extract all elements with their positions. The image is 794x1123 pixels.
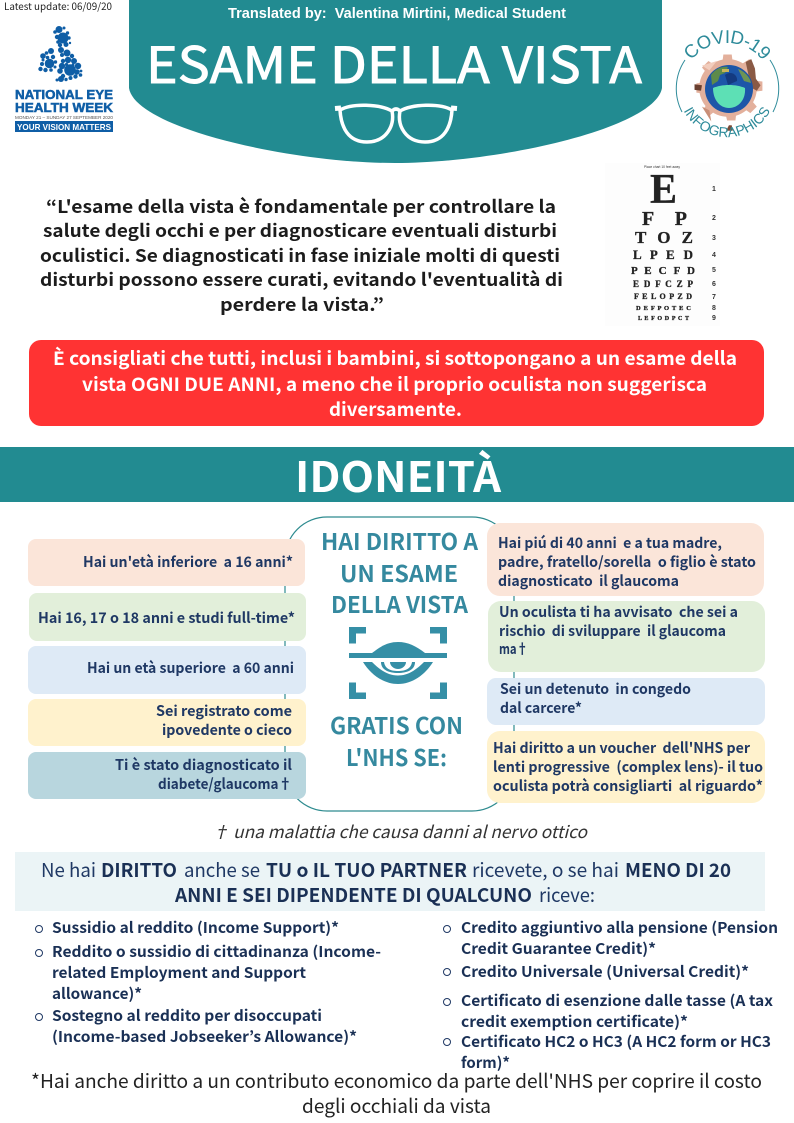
- logo: National Eye Health Week: [15, 26, 113, 132]
- eye chart: 6: [712, 281, 716, 288]
- criterion: visually impaired: [28, 699, 306, 746]
- benefits heading band: Ne hai: [41, 856, 96, 883]
- criterion: diabetes or glaucoma: diabete/glaucoma†: [158, 773, 292, 794]
- item: pension credit: [444, 917, 778, 959]
- criterion: visually impaired: Sei registrato come: [156, 700, 292, 721]
- red callout: vista OGNI DUE ANNI, a meno che il proprio oculista non suggerisca: [82, 371, 707, 397]
- item: HC2 or HC3 certificate: form)*: [461, 1052, 510, 1073]
- criterion: full-time student: [29, 593, 306, 641]
- eye chart: L P E D: [633, 247, 693, 262]
- item: income support: Sussidio al reddito (Income Support)*: [52, 917, 339, 938]
- criterion: glaucoma risk: Un oculista ti ha avvisato che sei a: [499, 601, 738, 622]
- benefits heading band: [15, 852, 765, 911]
- criterion: prisoner on leave: [487, 678, 765, 725]
- eye chart: L E F O D P C T: [638, 316, 689, 322]
- eye chart: F E L O P Z D: [634, 292, 692, 301]
- eye chart: D E F P O T E C: [636, 305, 691, 312]
- logo: COVID-19 infographics: [676, 30, 780, 138]
- quote: disturbi possono essere curati, evitando l'eventualità di: [40, 267, 563, 292]
- icon: glasses: [335, 105, 457, 142]
- eye chart: E: [650, 167, 677, 213]
- INFOGRAPHICS arc text: INFOGRAPHICS: [684, 107, 770, 138]
- criterion: over 60: Hai un età superiore a 60 anni: [87, 657, 294, 678]
- item: HC2 or HC3 certificate: Certificato HC2 o HC3 (A HC2 form or HC3: [461, 1031, 771, 1052]
- central panel: [285, 517, 514, 811]
- criterion: under 16: [28, 539, 305, 586]
- item: tax credit exemption: Certificato di esenzione dalle tasse (A tax: [461, 990, 774, 1011]
- panel heading bottom: L'NHS SE:: [346, 739, 447, 773]
- quote: oculistici. Se diagnosticati in fase iniziale molti di questi: [40, 243, 560, 268]
- icon: UK map made of dots: [38, 26, 82, 82]
- panel heading top: DELLA VISTA: [331, 586, 468, 620]
- criterion: prisoner on leave: Sei un detenuto in congedo: [500, 678, 691, 699]
- criterion: full-time student: Hai 16, 17 o 18 anni e studi full-time*: [38, 607, 295, 628]
- criterion: glaucoma risk: rischio di sviluppare il glaucoma: [499, 620, 726, 641]
- icon: eye scan: [349, 627, 447, 699]
- item: jobseeker's allowance: (Income-based Jobseeker’s Allowance)*: [52, 1026, 357, 1047]
- item: employment and support allowance: Reddito o sussidio di cittadinanza (Income-: [52, 941, 381, 962]
- ring arcs: [676, 60, 779, 112]
- logo dates: MONDAY 21 – SUNDAY 27 SEPTEMBER 2020: [15, 115, 113, 120]
- eye chart: 2: [712, 215, 716, 222]
- logo tagline: YOUR VISION MATTERS: [17, 122, 111, 132]
- benefits heading band: TU o IL TUO PARTNER: [266, 856, 467, 883]
- icon: hands around the globe: [695, 55, 762, 131]
- criterion: family history of glaucoma: [487, 523, 764, 596]
- criterion: glaucoma risk: [488, 601, 765, 672]
- footnote: glaucoma definition: † una malattia che causa danni al nervo ottico: [212, 818, 589, 843]
- quote: [40, 194, 563, 317]
- benefits heading band: ricevete, o se hai: [472, 856, 619, 883]
- benefits heading band: ANNI E SEI DIPENDENTE DI QUALCUNO: [174, 881, 532, 908]
- criterion: complex lens voucher: lenti progressive (complex lens)- il tuo: [493, 756, 763, 777]
- eye chart: F P: [642, 208, 687, 230]
- eye chart: 1: [712, 186, 716, 193]
- panel heading top: HAI DIRITTO A: [321, 523, 478, 557]
- panel heading top: UN ESAME: [340, 555, 458, 589]
- quote: salute degli occhi e per diagnosticare eventuali disturbi: [43, 218, 557, 243]
- logo heading: NATIONAL EYE: [15, 88, 113, 102]
- panel outline: [285, 517, 514, 811]
- logo heading: [15, 88, 113, 115]
- eye chart: 4: [712, 252, 716, 259]
- eye chart: [605, 163, 720, 326]
- item: employment and support allowance: related Employment and Support: [52, 962, 307, 983]
- red callout: È consigliati che tutti, inclusi i bambini, si sottopongano a un esame della: [53, 345, 737, 371]
- item: jobseeker's allowance: Sostegno al reddito per disoccupati: [52, 1005, 322, 1026]
- criterion: family history of glaucoma: diagnosticato il glaucoma: [498, 570, 679, 591]
- eye chart: T O Z: [635, 228, 693, 247]
- item: tax credit exemption: credit exemption certificate)*: [461, 1011, 688, 1032]
- header background: [129, 0, 662, 163]
- criterion: complex lens voucher: [487, 731, 765, 803]
- COVID-19 arc text: COVID-19: [685, 30, 770, 58]
- criterion: over 60: [28, 646, 306, 694]
- item: universal credit: Credito Universale (Universal Credit)*: [461, 961, 749, 982]
- criterion: prisoner on leave: dal carcere*: [500, 697, 582, 718]
- item: HC2 or HC3 certificate: [444, 1031, 771, 1073]
- logo heading: HEALTH WEEK: [15, 101, 113, 115]
- criterion: under 16: Hai un'età inferiore a 16 anni*: [83, 551, 293, 572]
- header panel: [129, 0, 662, 163]
- criterion: complex lens voucher: Hai diritto a un voucher dell'NHS per: [493, 737, 751, 758]
- item: employment and support allowance: allowance)*: [52, 983, 142, 1004]
- eye chart: 8: [712, 305, 716, 312]
- criterion: family history of glaucoma: padre, fratello/sorella o figlio è stato: [498, 551, 756, 572]
- eye chart: 7: [712, 294, 716, 301]
- eye chart: 5: [712, 267, 716, 274]
- closing note: [31, 1067, 762, 1119]
- criterion: diabetes or glaucoma: Ti è stato diagnosticato il: [115, 754, 292, 775]
- closing note: *Hai anche diritto a un contributo economico da parte dell'NHS per coprire il costo: [31, 1067, 762, 1094]
- criterion: complex lens voucher: oculista potrà consigliarti al riguardo*: [493, 775, 763, 796]
- panel heading top: [321, 523, 478, 620]
- closing note: degli occhiali da vista: [302, 1092, 491, 1119]
- red callout: diversamente.: [329, 396, 462, 422]
- item: pension credit: Credit Guarantee Credit)*: [461, 938, 656, 959]
- icon: globe with mask: [705, 65, 753, 113]
- section banner: Idoneità: IDONEITÀ: [295, 444, 502, 505]
- eye chart: P E C F D: [631, 265, 695, 277]
- eye chart: 3: [712, 235, 716, 242]
- right criteria list: [487, 523, 765, 803]
- item: employment and support allowance: [36, 941, 381, 1004]
- item: tax credit exemption: [444, 990, 774, 1032]
- red callout: [29, 340, 764, 426]
- quote: “L'esame della vista è fondamentale per controllare la: [46, 194, 556, 219]
- left criteria list: [28, 539, 306, 799]
- eye chart: E D F C Z P: [633, 279, 694, 289]
- eye chart: 9: [712, 315, 716, 322]
- criterion: visually impaired: ipovedente o cieco: [162, 719, 292, 740]
- criterion: family history of glaucoma: Hai piú di 40 anni e a tua madre,: [498, 532, 722, 553]
- item: pension credit: Credito aggiuntivo alla pensione (Pension: [461, 917, 778, 938]
- benefits list: right column: [444, 917, 778, 1073]
- title: ESAME DELLA VISTA: [146, 26, 643, 98]
- panel heading bottom: [330, 707, 463, 773]
- section banner: Idoneità: [0, 444, 794, 505]
- benefits heading band: riceve:: [539, 881, 595, 908]
- quote: perdere la vista.”: [220, 292, 384, 317]
- criterion: glaucoma risk: ma†: [499, 638, 528, 659]
- criterion: diabetes or glaucoma: [28, 752, 306, 799]
- panel heading bottom: GRATIS CON: [330, 707, 463, 741]
- item: jobseeker's allowance: [36, 1005, 357, 1047]
- benefits heading band: MENO DI 20: [625, 856, 731, 883]
- translator credit: Translated by: Valentina Mirtini, Medical Student: [228, 6, 566, 22]
- benefits heading band: DIRITTO: [101, 856, 177, 883]
- benefits list: left column: [36, 917, 381, 1047]
- eye chart: Place chart 10 feet away: [644, 164, 680, 169]
- benefits heading band: anche se: [184, 856, 260, 883]
